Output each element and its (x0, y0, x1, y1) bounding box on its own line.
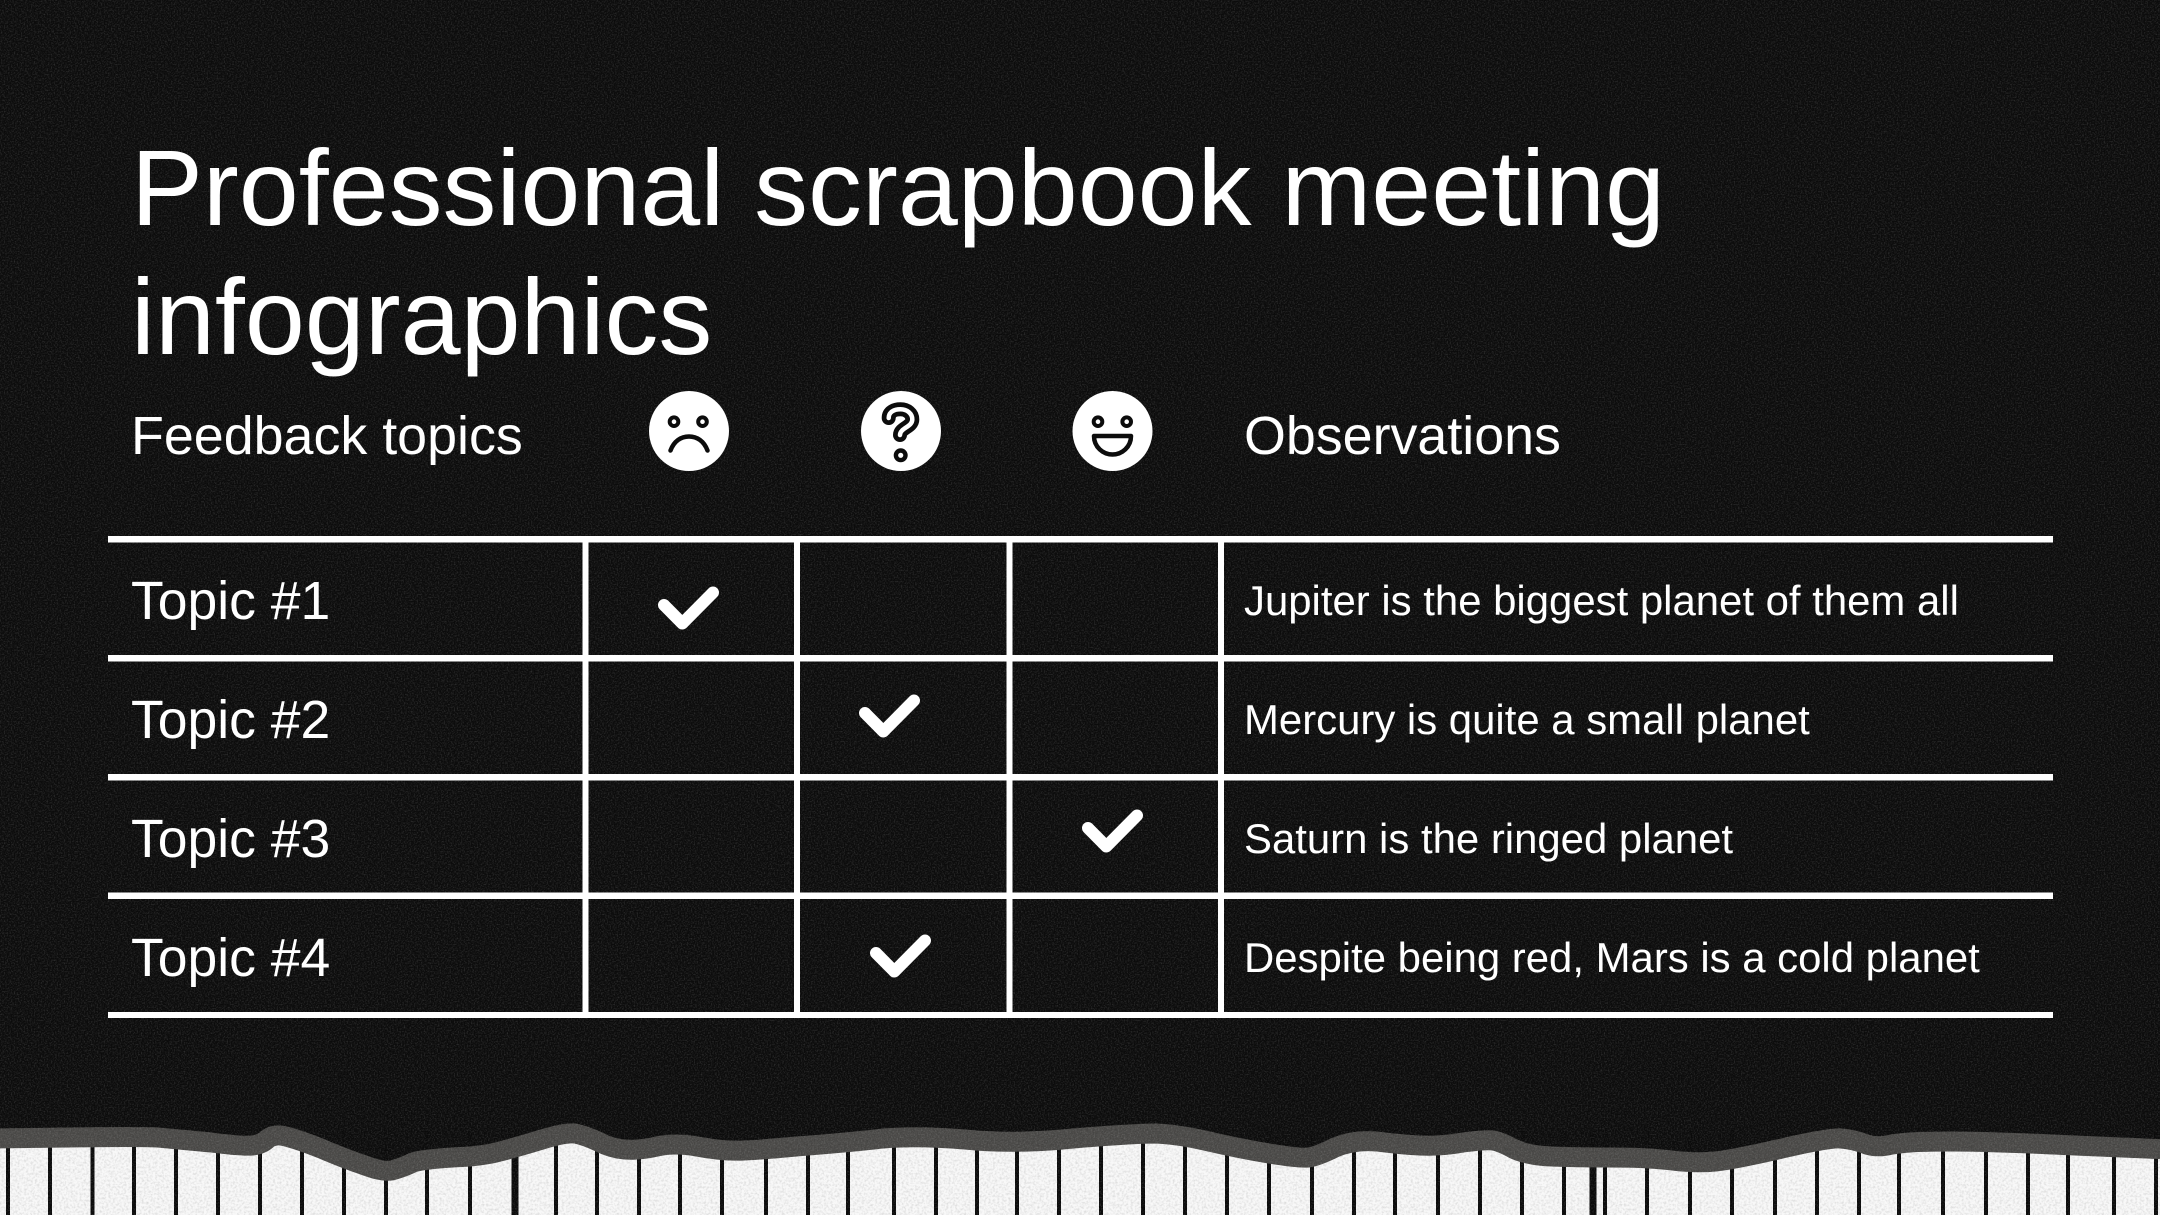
icon: question mark (861, 391, 941, 471)
row 1 observation: Jupiter is the biggest planet of them all (1244, 577, 1959, 624)
row 3 observation: Saturn is the ringed planet (1244, 815, 1733, 862)
table grid (108, 536, 2053, 1018)
title (131, 127, 1665, 377)
row 1 topic: Topic #1 (131, 572, 330, 631)
row 2 observation: Mercury is quite a small planet (1244, 696, 1810, 743)
row 4 topic: Topic #4 (131, 929, 330, 988)
icon: happy face (1072, 391, 1152, 471)
heading: observations: Observations (1244, 406, 1561, 466)
row 2 check (865, 700, 914, 732)
title: infographics (131, 256, 712, 377)
row 2 topic: Topic #2 (131, 691, 330, 750)
title: Professional scrapbook meeting (131, 127, 1665, 248)
row 3 topic: Topic #3 (131, 810, 330, 869)
row 1 check (664, 592, 713, 624)
row 3 check (1088, 816, 1137, 846)
row 4 observation: Despite being red, Mars is a cold planet (1244, 934, 1980, 981)
heading: feedback topics: Feedback topics (131, 406, 523, 466)
torn paper strip (0, 1125, 2160, 1215)
row 4 check (876, 940, 925, 972)
icon: sad face (649, 391, 729, 471)
